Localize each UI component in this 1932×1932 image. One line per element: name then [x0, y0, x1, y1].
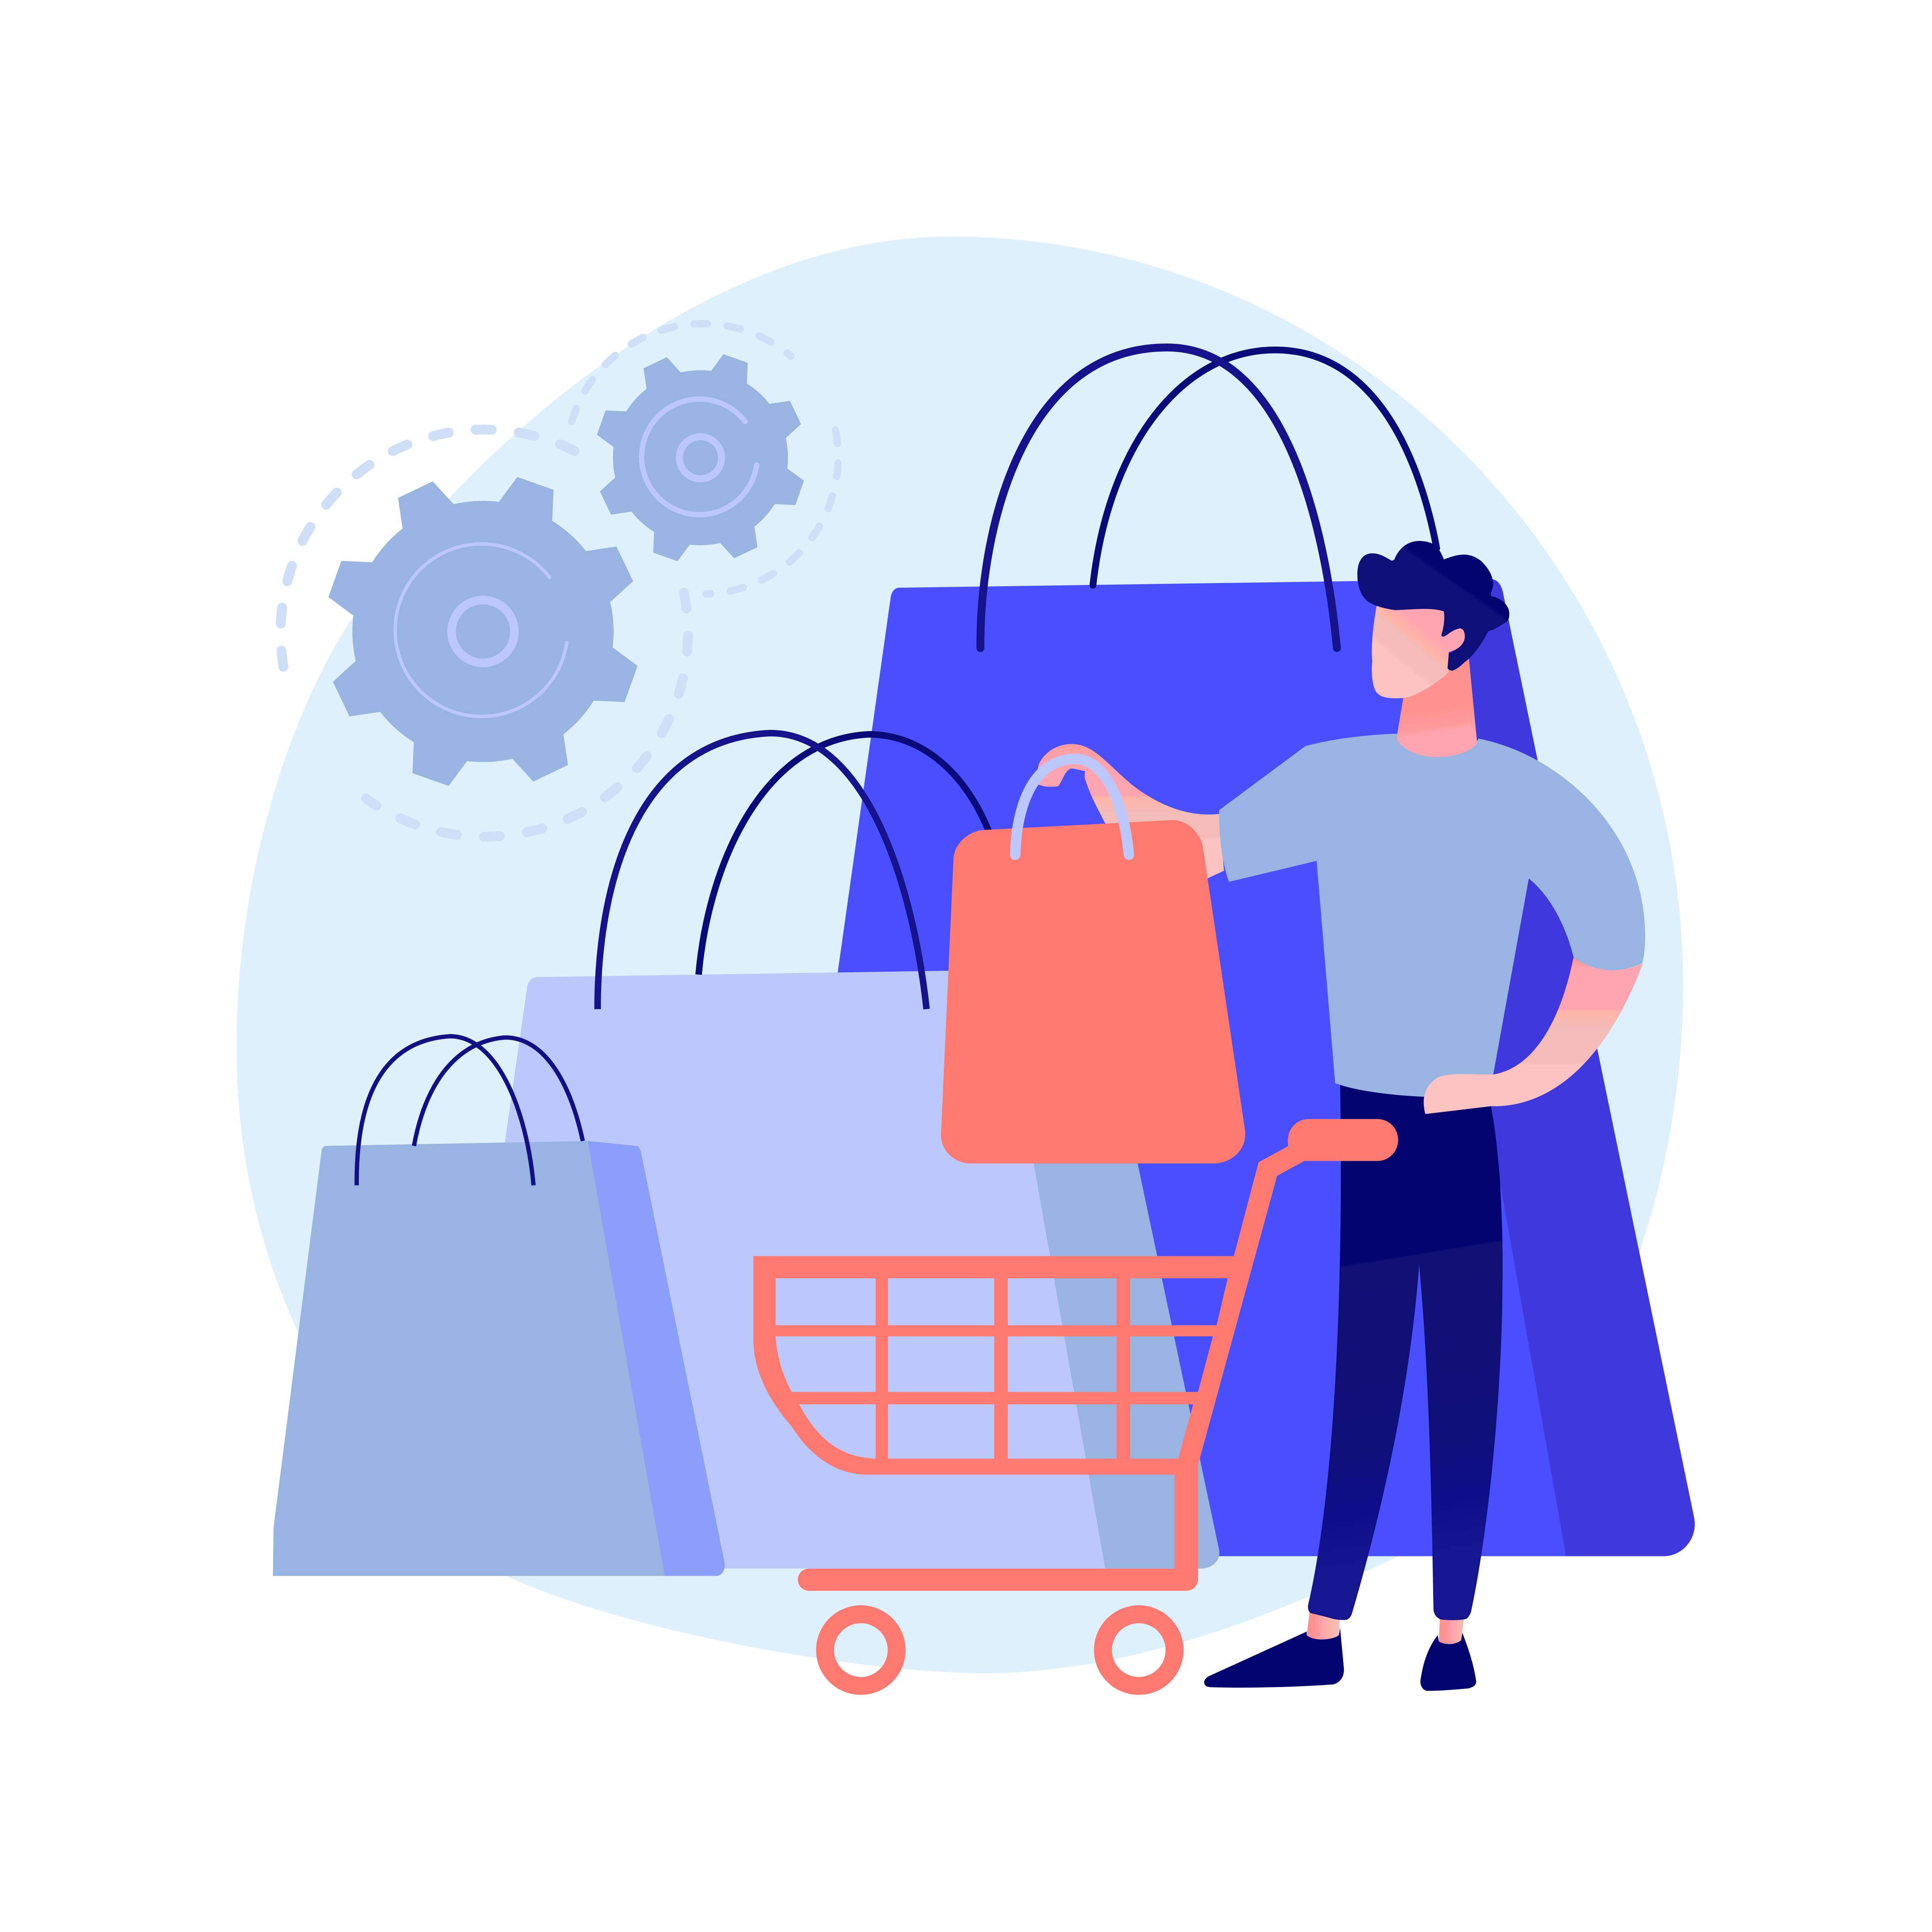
person — [941, 541, 1645, 1691]
right arm and hand — [1424, 957, 1643, 1114]
cart basket and frame — [753, 1119, 1398, 1591]
T-shirt — [1219, 734, 1645, 1099]
small bag side fold — [588, 1141, 725, 1576]
dashed orbit: large gear — [281, 430, 688, 837]
cart wheel right — [1103, 1614, 1175, 1686]
coral bag handle — [1015, 759, 1129, 855]
small bag handles — [357, 1036, 583, 1185]
large bag side fold — [1394, 579, 1695, 1556]
icon: large gear — [325, 473, 641, 789]
trousers — [1308, 1083, 1503, 1620]
coral shopping bag held by person — [941, 820, 1245, 1163]
small blue shopping bag — [273, 1036, 725, 1576]
cart wheel left — [825, 1614, 897, 1686]
medium bag side fold — [999, 968, 1219, 1568]
left shoe — [1204, 1628, 1344, 1688]
dashed orbit: small gear — [572, 324, 838, 594]
shopping cart — [753, 1119, 1398, 1686]
hair — [1357, 541, 1509, 671]
icon: small gear — [595, 352, 806, 564]
left ankle — [1307, 1605, 1340, 1639]
right ankle — [1439, 1612, 1465, 1644]
large blue shopping bag — [755, 347, 1695, 1556]
large bag handles — [980, 347, 1437, 648]
left arm holding bag — [1037, 744, 1224, 878]
neck — [1397, 655, 1477, 757]
right shoe — [1420, 1633, 1476, 1691]
face and ear — [1372, 603, 1465, 698]
medium lavender shopping bag — [444, 733, 1219, 1568]
medium bag handles — [598, 733, 990, 1009]
background blob — [236, 236, 1683, 1673]
